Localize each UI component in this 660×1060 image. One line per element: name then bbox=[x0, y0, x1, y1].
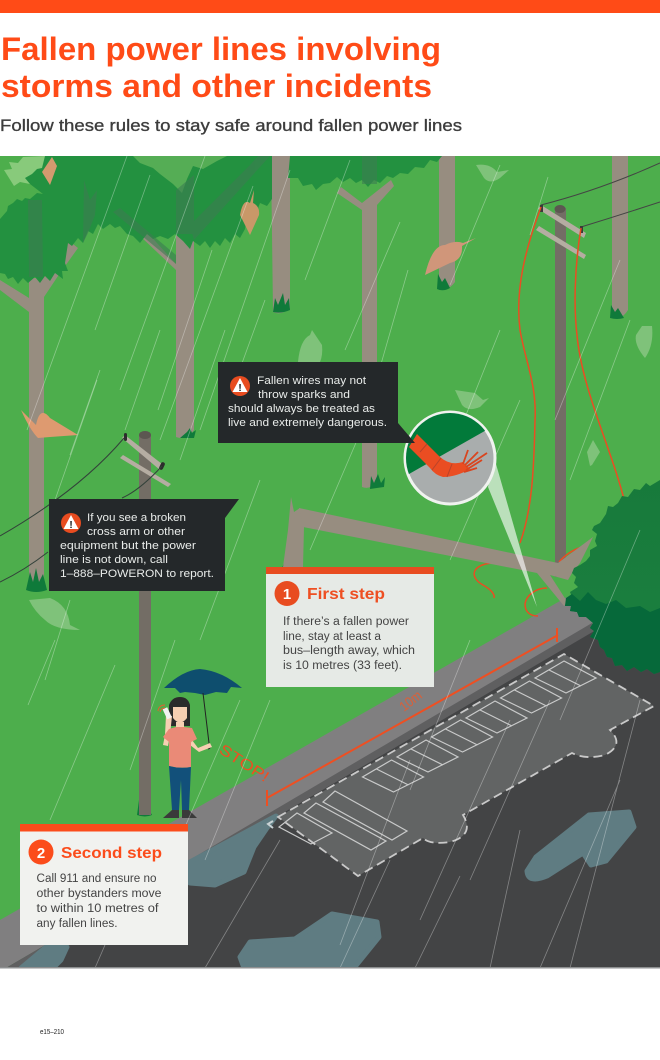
heading: First step bbox=[307, 586, 385, 603]
illustration scene bbox=[0, 156, 660, 968]
zoom beam bbox=[488, 457, 537, 607]
title: Fallen power lines involving bbox=[1, 31, 441, 67]
fallen tree bbox=[283, 497, 593, 606]
grass tufts bbox=[26, 274, 624, 816]
callout: broken cross arm: line is not down, call bbox=[60, 554, 168, 566]
subtitle: Follow these rules to stay safe around fallen power lines bbox=[0, 116, 462, 135]
title: storms and other incidents bbox=[1, 68, 432, 104]
panel: second step bbox=[20, 824, 188, 945]
rain bbox=[27, 156, 640, 968]
body text bbox=[36, 873, 162, 930]
lawn bbox=[0, 156, 660, 968]
callout: fallen wires: Fallen wires may not bbox=[257, 375, 366, 387]
callout: fallen wires: should always be treated as bbox=[228, 403, 376, 415]
body text: to within 10 metres of bbox=[36, 903, 159, 915]
bush bbox=[565, 480, 660, 674]
step number 1: 1 bbox=[283, 586, 291, 603]
footer code: e15–210 bbox=[40, 1029, 64, 1036]
umbrella bbox=[164, 669, 242, 749]
callout: broken cross arm: If you see a broken bbox=[87, 512, 186, 524]
trunks seen through canopy bbox=[28, 156, 270, 277]
step number 1 bbox=[274, 581, 300, 606]
callout: fallen wires: live and extremely dangerous. bbox=[228, 417, 387, 429]
road bbox=[8, 631, 660, 967]
sidewalk bbox=[0, 597, 594, 968]
canopy gap bbox=[133, 156, 227, 193]
magnifier circle bbox=[400, 410, 495, 504]
body text: line, stay at least a bbox=[283, 631, 382, 643]
puddles bbox=[21, 812, 634, 968]
icon: warning bbox=[61, 513, 81, 533]
right canopy bbox=[288, 156, 442, 190]
callout: broken cross arm: equipment but the power bbox=[60, 540, 196, 552]
leaves bbox=[21, 157, 652, 630]
step number 2: 2 bbox=[37, 845, 45, 862]
step number 2 bbox=[28, 840, 54, 864]
body text: bus–length away, which bbox=[283, 645, 415, 657]
callout: broken cross arm: 1–888–POWERON to report. bbox=[60, 568, 214, 580]
callout: broken cross arm bbox=[49, 499, 239, 591]
top bar bbox=[0, 0, 660, 13]
downed orange wires bbox=[474, 207, 625, 616]
body text: any fallen lines. bbox=[36, 918, 118, 930]
curb bbox=[6, 623, 596, 968]
title bbox=[1, 31, 441, 104]
body text: If there’s a fallen power bbox=[283, 616, 409, 628]
bystander with umbrella bbox=[158, 669, 242, 818]
bus outline bbox=[268, 654, 654, 876]
body text: Call 911 and ensure no bbox=[36, 873, 156, 885]
tree canopies bbox=[0, 156, 442, 284]
body text: is 10 metres (33 feet). bbox=[283, 660, 402, 672]
icon: warning: ! bbox=[69, 520, 73, 531]
bus windows bbox=[279, 661, 596, 850]
label: 10m: 10m bbox=[396, 687, 425, 714]
pale canopy bbox=[4, 156, 45, 186]
body text bbox=[283, 616, 415, 672]
scene bottom edge bbox=[0, 967, 660, 968]
icon: warning: ! bbox=[238, 383, 242, 394]
body text: other bystanders move bbox=[36, 888, 162, 900]
callout: fallen wires bbox=[218, 362, 415, 443]
distance measure line bbox=[267, 628, 558, 806]
panel: first step bbox=[266, 567, 434, 687]
callout: fallen wires: throw sparks and bbox=[258, 389, 350, 401]
callout: broken cross arm: cross arm or other bbox=[87, 526, 185, 538]
dark canopy bbox=[0, 156, 272, 284]
heading: Second step bbox=[61, 845, 162, 862]
left power pole bbox=[0, 431, 171, 815]
label: STOP!: STOP! bbox=[216, 741, 272, 786]
right power pole bbox=[536, 163, 660, 577]
icon: warning bbox=[230, 376, 250, 396]
back trees bbox=[0, 156, 628, 591]
